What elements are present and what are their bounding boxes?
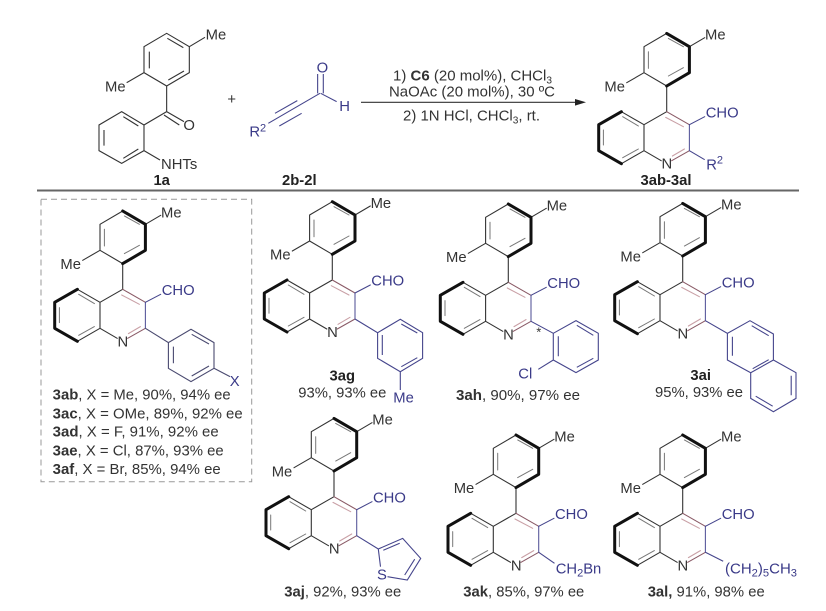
structure 3al: CHO <box>722 507 755 523</box>
structure 3ag: Me <box>270 248 291 264</box>
label 3ab-3al: 3ab-3al <box>640 173 692 189</box>
structure 3ab-3af: X <box>230 374 240 390</box>
structure 3ag: CHO <box>371 274 404 290</box>
reactant 2b-2l: R <box>249 125 260 141</box>
caption 3ah: 3ah, 90%, 97% ee <box>456 388 580 404</box>
product 3ab-3al: Me <box>705 28 726 44</box>
structure 3ak <box>448 429 601 579</box>
dashed panel: para-substituted products <box>41 199 252 482</box>
structure 3aj <box>266 413 421 584</box>
structure 3ai: Me <box>721 198 742 214</box>
structure 3ah: * <box>536 324 541 339</box>
reaction conditions: , rt. <box>518 109 540 125</box>
yields list 3ab-3af: 3ae, X = Cl, 87%, 93% ee <box>53 444 224 460</box>
product 3ab-3al: CHO <box>706 105 739 121</box>
structure 3ak: CHO <box>555 507 588 523</box>
divider <box>37 190 799 192</box>
reaction conditions <box>389 69 555 127</box>
product 3ab-3al: R <box>706 158 717 174</box>
structure 3ai: CHO <box>722 275 755 291</box>
reaction arrow <box>361 99 586 106</box>
caption 3aj: 3aj, 92%, 93% ee <box>284 585 401 601</box>
reaction conditions: NaOAc (20 mol%), 30 ºC <box>389 85 555 101</box>
yields list 3ab-3af: 3ab, X = Me, 90%, 94% ee <box>53 387 231 403</box>
structure 3al: N <box>678 558 688 574</box>
plus sign: + <box>227 92 236 108</box>
structure 3ak: CH <box>556 561 577 577</box>
structure 3ab-3af: CHO <box>162 283 195 299</box>
structure 3al: Me <box>620 481 641 497</box>
structure 3ak: 2 <box>577 567 583 579</box>
reactant 2b-2l: O <box>317 60 328 76</box>
caption 3al: 3al, 91%, 98% ee <box>648 585 765 601</box>
product 3ab-3al: 2 <box>717 155 723 167</box>
product 3ab-3al: Me <box>604 79 625 95</box>
caption 3ai: 3ai <box>690 368 711 384</box>
structure 3al: ) <box>758 561 763 577</box>
structure 3ak: N <box>511 558 521 574</box>
structure 3aj: Me <box>372 413 393 429</box>
structure 3ab-3af: N <box>117 334 128 350</box>
reactant 2b-2l: H <box>339 99 350 115</box>
caption 3ak: 3ak, 85%, 97% ee <box>463 585 584 601</box>
structure 3ak: Me <box>454 481 474 497</box>
structure 3al: Me <box>721 429 742 445</box>
caption 3ai <box>655 368 743 401</box>
reactant 2b-2l: 2 <box>260 122 266 134</box>
yields list 3ab-3af: 3af, X = Br, 85%, 94% ee <box>53 462 221 478</box>
structure 3ah: Me <box>446 250 467 266</box>
structure 3ab-3af <box>55 205 240 390</box>
structure 3aj: S <box>377 568 387 584</box>
structure 3ai <box>615 198 796 412</box>
reaction conditions: 3 <box>546 76 552 87</box>
structure 3al: 3 <box>791 567 797 579</box>
structure 3aj: N <box>329 542 339 558</box>
reaction conditions: 3 <box>513 116 519 127</box>
structure 3ab-3af: Me <box>60 257 81 273</box>
yields list 3ab-3af <box>53 387 243 478</box>
label 2b-2l: 2b-2l <box>282 173 317 189</box>
caption 3ag: 3ag <box>330 369 355 385</box>
structure 3aj: CHO <box>373 490 406 506</box>
caption 3ai: 95%, 93% ee <box>655 385 743 401</box>
yields list 3ab-3af: 3ad, X = F, 91%, 92% ee <box>53 425 219 441</box>
product 3ab-3al <box>599 28 739 174</box>
structure 3ah: N <box>503 327 514 343</box>
structure 3ah: Me <box>547 198 567 214</box>
structure 3ah: CHO <box>547 276 580 292</box>
structure 3ai: Me <box>620 249 641 265</box>
caption 3ag <box>298 369 386 401</box>
reactant 1a <box>99 27 226 173</box>
structure 3ag: Me <box>371 196 391 212</box>
caption 3ag: 93%, 93% ee <box>298 385 386 401</box>
reactant 1a: O <box>183 118 195 134</box>
structure 3al: 5 <box>763 567 769 579</box>
product 3ab-3al: N <box>662 157 672 173</box>
structure 3al: (CH <box>725 561 751 577</box>
structure 3ag <box>264 196 423 406</box>
structure 3ai: N <box>678 327 688 343</box>
structure 3ak: Me <box>554 429 575 445</box>
reactant 2b-2l <box>249 60 350 141</box>
structure 3ag: N <box>327 325 338 341</box>
structure 3al <box>615 429 797 579</box>
reaction conditions: 2) 1N HCl, CHCl <box>403 109 512 125</box>
label 1a: 1a <box>153 173 171 189</box>
reactant 1a: Me <box>105 80 126 96</box>
structure 3ag: Me <box>393 390 414 406</box>
reactant 1a: NHTs <box>161 157 197 173</box>
structure 3ab-3af: Me <box>161 205 182 221</box>
reaction conditions: 1) C6 (20 mol%), CHCl <box>393 69 545 85</box>
yields list 3ab-3af: 3ac, X = OMe, 89%, 92% ee <box>53 406 243 422</box>
structure 3aj: Me <box>272 464 292 480</box>
structure 3ah: Cl <box>518 366 532 382</box>
reactant 1a: Me <box>206 27 226 43</box>
structure 3al: 2 <box>752 567 758 579</box>
structure 3al: CH <box>769 561 791 577</box>
structure 3ak: Bn <box>583 561 601 577</box>
structure 3ah <box>440 198 598 382</box>
